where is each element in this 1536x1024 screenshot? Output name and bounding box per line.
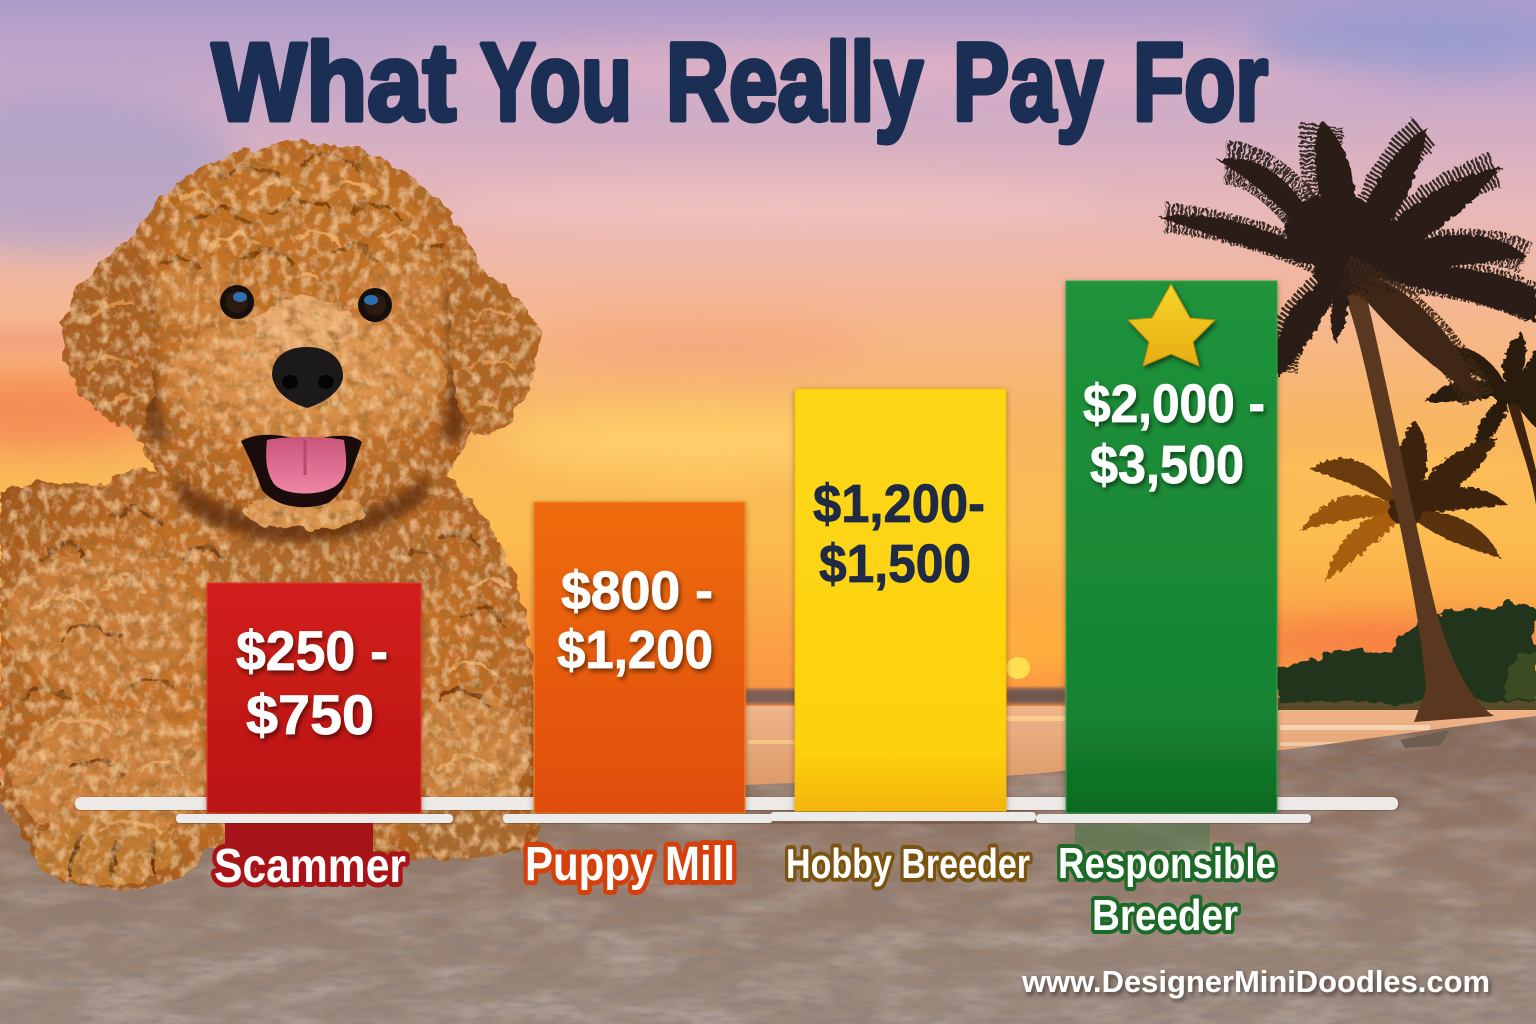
value: puppy mill price line 2: $1,200 [557, 620, 713, 680]
puppy muzzle [165, 297, 445, 529]
value: responsible breeder price line 2: $3,500 [1090, 435, 1244, 495]
shelf back rail [75, 797, 1398, 810]
bar: Puppy Mill [534, 502, 745, 813]
puppy right ear [438, 240, 540, 437]
title: What [212, 21, 456, 144]
palm tree main [1158, 120, 1536, 722]
label: Breeder: Breeder [1092, 891, 1238, 940]
puppy body and legs [0, 470, 540, 890]
sunset sky background [0, 0, 1536, 780]
distant shoreline and water [520, 688, 1536, 786]
palm trunk [1340, 285, 1494, 722]
bar: Hobby Breeder [795, 389, 1006, 811]
value: responsible breeder price: $2,000 - [1083, 374, 1265, 434]
puppy ear shadows [138, 285, 468, 542]
value: hobby breeder price line 2: $1,500 [819, 534, 971, 594]
bar: Responsible Breeder [1066, 281, 1277, 813]
value: scammer price line 2: $750 [246, 683, 374, 746]
puppy [0, 142, 540, 890]
puppy nose [272, 347, 343, 408]
distant tree line [1278, 601, 1536, 710]
icon: gold star [1128, 284, 1215, 366]
shelf front ledges [176, 812, 1311, 823]
value: hobby breeder price: $1,200- [813, 474, 985, 534]
puppy mouth and tongue [241, 435, 362, 507]
puppy left ear [61, 235, 155, 432]
title: For [1133, 21, 1268, 144]
value: scammer price: $250 - [236, 619, 388, 682]
puppy head [114, 142, 492, 537]
value: puppy mill price: $800 - [561, 561, 713, 621]
title: Pay [953, 21, 1103, 144]
palm tree small front [1300, 420, 1508, 600]
website url: www.DesignerMiniDoodles.com [1021, 964, 1490, 999]
puppy eyes [220, 285, 392, 322]
title: You [480, 21, 632, 144]
title: Really [666, 21, 923, 144]
label: Puppy Mill: Puppy Mill [525, 838, 735, 891]
label: Scammer: Scammer [214, 840, 406, 893]
label: Responsible: Responsible [1058, 839, 1276, 888]
label: Hobby Breeder: Hobby Breeder [786, 840, 1030, 887]
bar reflections [225, 823, 1210, 863]
bar: Scammer [207, 583, 421, 813]
title [212, 21, 1268, 144]
palm tree small rear right [1425, 332, 1536, 505]
sandy beach [0, 700, 1536, 1024]
